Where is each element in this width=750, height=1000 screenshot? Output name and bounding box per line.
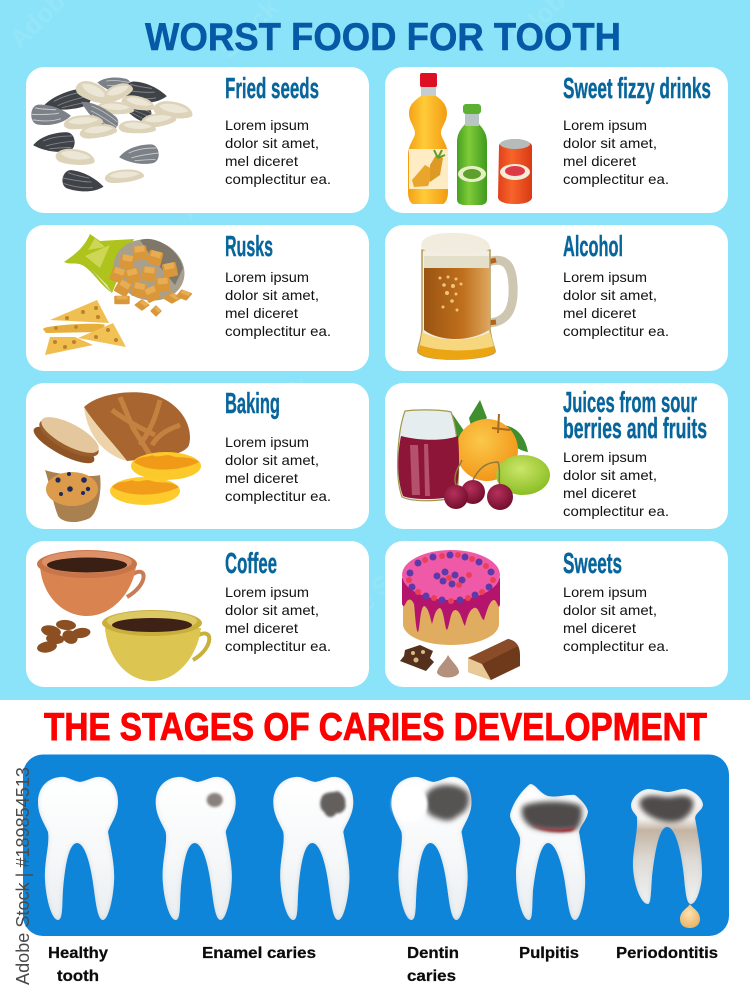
title: worst food for tooth: WORST FOOD FOR TOOTH [145,16,621,59]
icon: drinks [408,73,532,205]
panel: sweets [385,541,728,687]
text block [563,584,669,654]
heading: Baking [225,388,280,420]
heading: Rusks [225,231,273,263]
text block [225,117,331,187]
panel: sweet fizzy drinks [385,67,728,213]
text block: mel diceret [225,470,298,486]
text block: mel diceret [563,305,636,321]
text block [563,117,669,187]
panel: juices [385,383,728,529]
text block: complectitur ea. [225,488,331,504]
panel: rusks [26,225,369,371]
label: enamel caries: Enamel caries [202,945,316,962]
tooth: enamel caries advanced [273,777,353,920]
label: pulpitis: Pulpitis [519,945,579,962]
text block: complectitur ea. [225,323,331,339]
text block: complectitur ea. [225,171,331,187]
text block: dolor sit amet, [563,602,657,618]
background: light blue upper area [0,0,750,700]
text block: dolor sit amet, [225,452,319,468]
heading: Sweets [563,548,622,580]
panel: alcohol [385,225,728,371]
text block [225,584,331,654]
text block: dolor sit amet, [225,287,319,303]
text block: Lorem ipsum [225,117,309,133]
icon: bag of rusks and crackers [43,230,193,355]
background: white lower area [0,701,750,1000]
text block: mel diceret [563,153,636,169]
icon: seeds pile [31,75,194,196]
tooth: healthy [38,777,118,920]
pus ball [680,904,700,928]
label: dentin caries: caries [407,968,456,985]
text block: Lorem ipsum [563,269,647,285]
text block: dolor sit amet, [225,602,319,618]
text block: mel diceret [225,305,298,321]
text block: Lorem ipsum [225,584,309,600]
text block: dolor sit amet, [563,135,657,151]
watermark pattern [3,0,677,664]
text block: dolor sit amet, [225,135,319,151]
text block: mel diceret [225,620,298,636]
text block: complectitur ea. [225,638,331,654]
text block: Lorem ipsum [563,584,647,600]
label: dentin caries [407,945,459,985]
text block: Lorem ipsum [225,434,309,450]
heading: Coffee [225,548,277,580]
watermark pattern: Adobe Stock [543,220,677,354]
text block [225,269,331,339]
watermark pattern: Adobe Stock [183,370,317,504]
watermark pattern: Adobe [523,446,601,524]
tooth: enamel caries early [156,777,236,920]
label: dentin caries: Dentin [407,945,459,962]
tooth: periodontitis [631,789,703,928]
text block: Lorem ipsum [563,449,647,465]
text block: complectitur ea. [563,171,669,187]
text block: Lorem ipsum [563,117,647,133]
text block [225,434,331,504]
text block: complectitur ea. [563,323,669,339]
panel: coffee [26,541,369,687]
text block [563,449,669,519]
text block: mel diceret [225,153,298,169]
tooth: pulpitis [510,784,588,920]
panel: caries stages [23,754,729,936]
text block: dolor sit amet, [563,467,657,483]
text block: dolor sit amet, [563,287,657,303]
watermark pattern: Stock [603,593,675,664]
tooth: dentin caries [392,777,472,920]
watermark pattern: Stock [43,133,115,204]
heading [563,387,707,445]
stock credit vertical text: Adobe Stock | #189854513 [12,767,33,985]
text block [563,269,669,339]
text block: complectitur ea. [563,503,669,519]
text block: Lorem ipsum [225,269,309,285]
watermark pattern: Adobe Stock [173,90,307,224]
label: healthy tooth: Healthy [48,945,108,962]
heading: Fried seeds [225,73,319,105]
text block: mel diceret [563,620,636,636]
icon: coffee cups and beans [36,550,209,681]
icon: beer mug [418,233,513,360]
icon: cake and chocolate [400,550,520,680]
label: healthy tooth: tooth [57,968,99,985]
text block: mel diceret [563,485,636,501]
watermark pattern: Adobe Stock [303,530,437,664]
label: periodontitis: Periodontitis [616,945,718,962]
label: healthy tooth [48,945,108,985]
heading: Alcohol [563,231,623,263]
panel: fried seeds [26,67,369,213]
panel: baking [26,383,369,529]
text block: complectitur ea. [563,638,669,654]
icon: bread and pastries [29,392,201,522]
icon: juice glass and fruits [398,400,550,510]
